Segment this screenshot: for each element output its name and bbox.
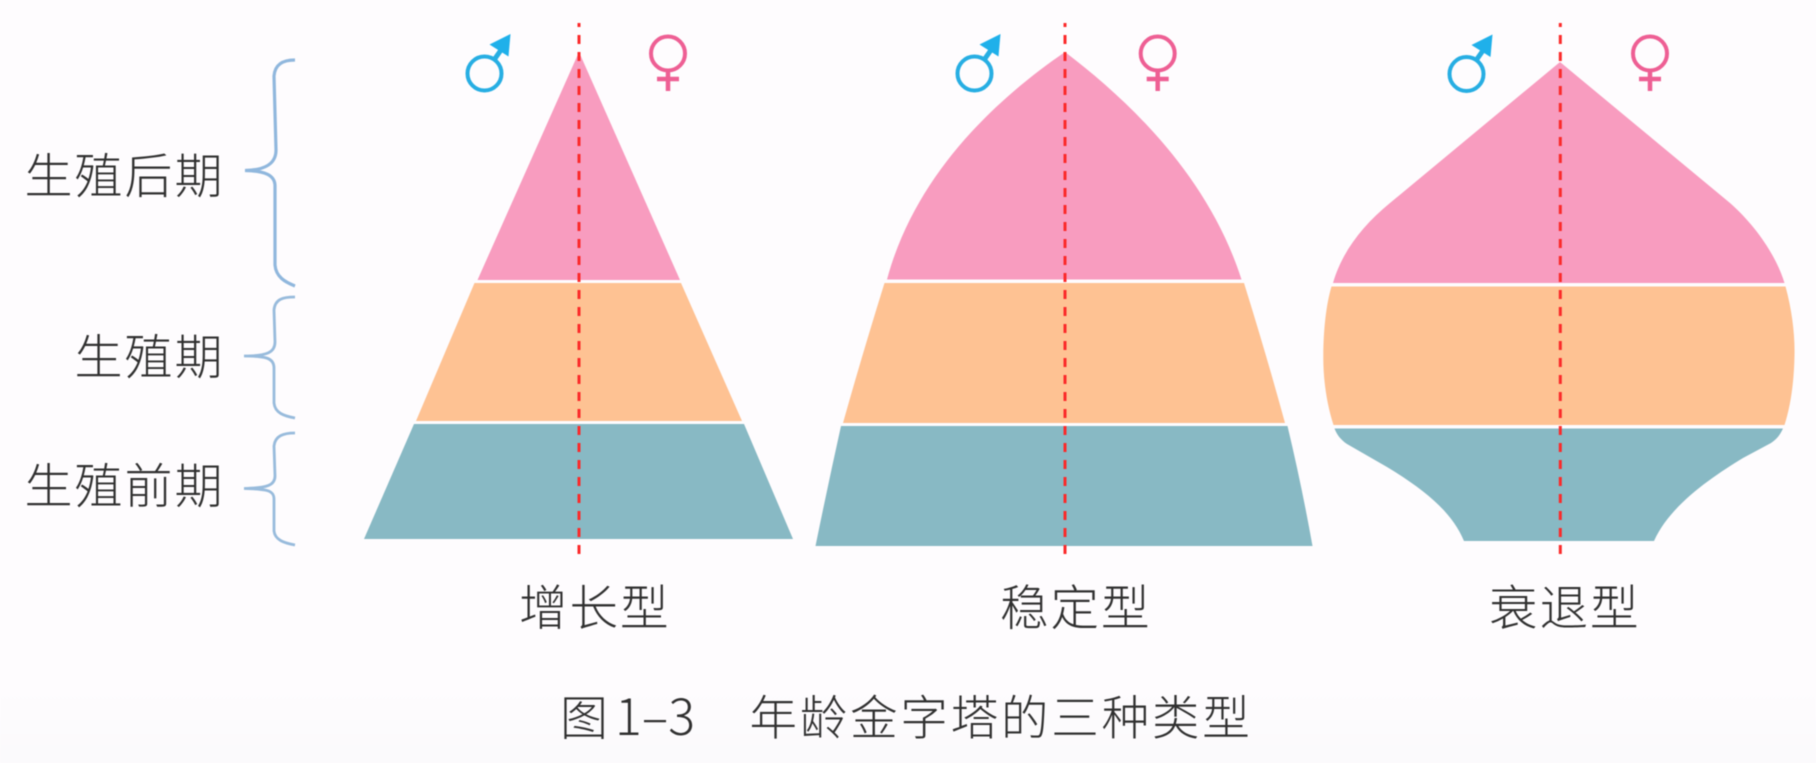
caption: 年龄金字塔的三种类型 xyxy=(750,693,1252,746)
icon: female symbol xyxy=(651,36,685,91)
layer: reproductive xyxy=(1323,286,1795,425)
label: pre-reproductive stage: 生殖前期 xyxy=(24,461,225,514)
icon: male symbol xyxy=(1450,34,1492,91)
label: declining type: 衰退型 xyxy=(1489,582,1641,636)
axis: dashed centre line xyxy=(578,23,580,562)
caption xyxy=(560,678,1252,750)
icon: male symbol xyxy=(958,34,1000,90)
layer: post-reproductive xyxy=(887,52,1242,280)
layer: pre-reproductive xyxy=(364,424,793,539)
layer: pre-reproductive xyxy=(1334,428,1783,541)
axis: dashed centre line xyxy=(1559,23,1562,562)
caption: 图 xyxy=(560,693,608,746)
brace: reproductive stage xyxy=(244,297,295,418)
layer: pre-reproductive xyxy=(816,426,1312,546)
brace: pre-reproductive stage xyxy=(244,433,295,545)
icon: female symbol xyxy=(1141,36,1175,91)
brace: post-reproductive stage xyxy=(245,60,295,286)
label: growth type: 增长型 xyxy=(519,582,671,636)
pyramid: declining type xyxy=(1323,23,1795,636)
layer: post-reproductive xyxy=(1333,62,1784,283)
icon: female symbol xyxy=(1633,36,1667,91)
layer: reproductive xyxy=(843,283,1285,423)
pyramid: stable type xyxy=(816,23,1312,636)
caption: 1–3 xyxy=(615,678,695,750)
label: reproductive stage: 生殖期 xyxy=(74,332,225,385)
layer: post-reproductive xyxy=(478,52,680,280)
layer: reproductive xyxy=(416,283,742,421)
icon: male symbol xyxy=(468,34,510,90)
label: post-reproductive stage: 生殖后期 xyxy=(24,151,225,204)
pyramid: growth type xyxy=(364,23,793,636)
label: stable type: 稳定型 xyxy=(1000,582,1152,636)
stage labels with braces xyxy=(24,60,295,545)
axis: dashed centre line xyxy=(1064,23,1066,562)
